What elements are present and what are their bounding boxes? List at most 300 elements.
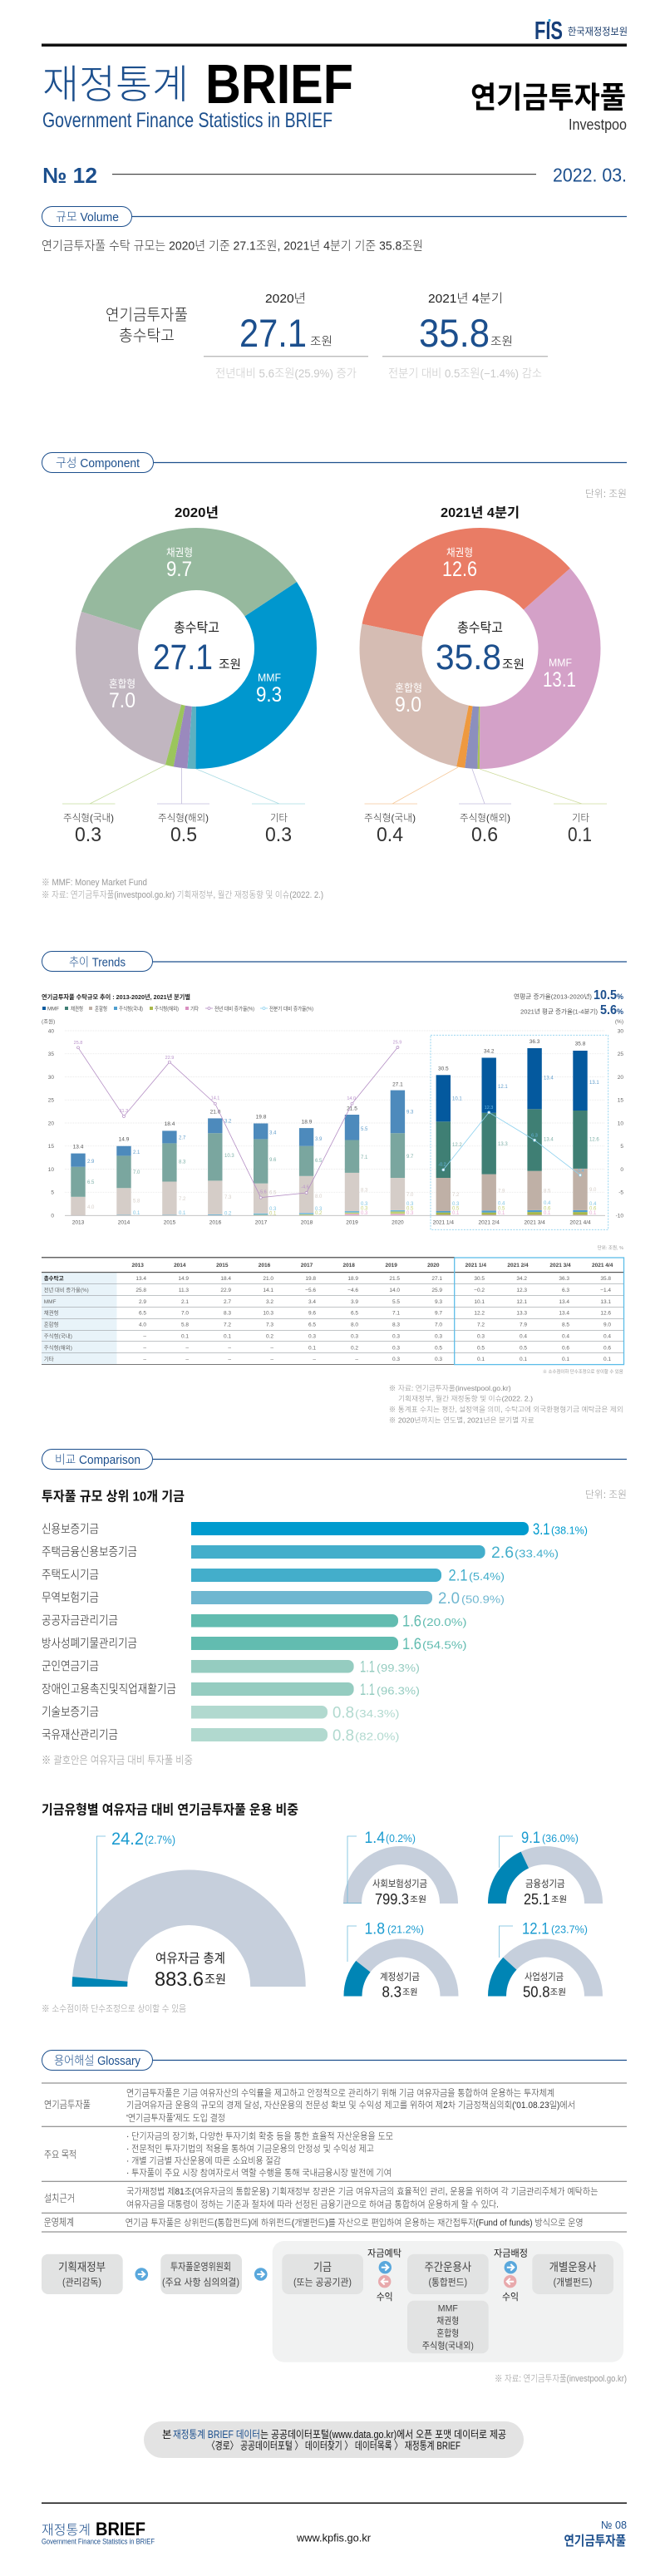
bar: 공공자금관리기금 (42, 1613, 467, 1631)
bar: 무역보험기금: (50.9%) (461, 1593, 505, 1606)
logo: FIS 한국재정정보원: FIS (534, 16, 563, 45)
label: 총수탁고 (106, 306, 188, 345)
callout: average growth: 5.6 (600, 1003, 617, 1017)
table values: 18.9 (347, 1276, 358, 1282)
donut value labels: 9.3 (256, 683, 282, 707)
table footnote: ※ 소수점이하 단수조정으로 상이할 수 있음 (543, 1368, 623, 1375)
table row labels: 주식형(해외) (44, 1343, 72, 1351)
stacked bars 2021 quarters (436, 1048, 588, 1215)
segment value labels: 13.3 (498, 1142, 508, 1147)
table values: 0.3 (392, 1333, 400, 1339)
combo chart: stacked bars and growth lines: (%) (615, 1019, 623, 1025)
component notes: ※ 자료: 연기금투자풀(investpool.go.kr) 기획재정부, 월간 재정동향 및 이슈(2022. 2.) (42, 889, 323, 900)
label: 총수탁고: 연기금투자풀 (106, 306, 188, 324)
glossary table (42, 2083, 627, 2232)
segment value labels: 3.4 (269, 1130, 277, 1135)
donut chart 2020 (106, 559, 286, 738)
box: fund types: 주식형(국내외) (422, 2341, 474, 2352)
gauge: total idle funds (96, 1830, 278, 1991)
gauge: 사회보험성기금 (347, 1830, 449, 1908)
bar: 주택도시기금: 2.1 (449, 1568, 467, 1584)
table values: 14.9 (178, 1276, 189, 1282)
total labels: 36.3 (530, 1039, 540, 1045)
right axis: -5 (618, 1190, 623, 1196)
bar: 신용보증기금 (42, 1521, 588, 1539)
small category labels (63, 812, 292, 846)
small category labels: 기타 (572, 812, 589, 824)
box: 기금: (또는 공공기관) (293, 2278, 352, 2288)
small category labels: 주식형(해외) (158, 812, 209, 824)
stat: 2020: 2020년 (265, 292, 306, 306)
table values: 14.1 (263, 1288, 273, 1293)
callout: average growth: 2021년 평균 증가율(1-4분기) (520, 1007, 598, 1016)
trends source notes: 기획재정부, 월간 재정동향 및 이슈(2022. 2.) (398, 1395, 533, 1403)
segment value labels: 4.0 (87, 1205, 95, 1210)
arrow icon (135, 2268, 148, 2281)
table values: – (185, 1345, 189, 1351)
table values: 3.4 (308, 1299, 316, 1305)
stat: 2021 Q4: 조원 (490, 334, 513, 347)
table values: 0.3 (435, 1333, 442, 1339)
table values: 10.1 (474, 1299, 485, 1305)
table values: 22.9 (220, 1288, 231, 1293)
footer logo: Government Finance Statistics in BRIEF (42, 2537, 155, 2545)
table row labels: 주식형(국내) (44, 1332, 72, 1339)
table values: 12.6 (600, 1311, 611, 1317)
glossary row: 설치근거: 설치근거 (44, 2193, 75, 2204)
heading: 2020년: 2020년 (175, 505, 219, 520)
gauge: 금융성기금: 조원 (551, 1895, 567, 1905)
box: 투자풀운영위원회: 투자풀운영위원회 (170, 2261, 231, 2273)
table values: 0.1 (181, 1333, 189, 1339)
gauge: 계정성기금: 1.8 (364, 1920, 385, 1938)
footer (42, 2502, 627, 2549)
table values (135, 1276, 611, 1362)
table values: 0.2 (351, 1345, 358, 1351)
table values: – (143, 1345, 146, 1351)
gauge: 사업성기금: 12.1 (522, 1920, 549, 1938)
glossary row: 주요 목적 (44, 2131, 393, 2178)
gauge: 사업성기금: (23.7%) (551, 1923, 588, 1935)
trends source notes: ※ 2020년까지는 연도별, 2021년은 분기별 자료 (389, 1416, 534, 1424)
table row labels: MMF (44, 1299, 57, 1305)
section heading: 규모 Volume (42, 206, 627, 226)
x axis labels: 2021 1/4 (433, 1220, 454, 1225)
segment value labels: 7.1 (361, 1155, 368, 1160)
box: 투자풀운영위원회: (주요 사항 심의의결) (162, 2278, 239, 2288)
box: fund types: 채권형 (436, 2316, 459, 2327)
title: 재정통계 BRIEF (42, 53, 353, 116)
glossary row: 주요 목적: · 투자풀이 주요 시장 참여자로서 역할 수행을 통해 국내금융시장 발전에 기여 (126, 2166, 392, 2178)
stat: 2021 Q4: 전분기 대비 0.5조원(−1.4%) 감소 (388, 367, 542, 380)
gauge: 사회보험성기금: (0.2%) (386, 1832, 416, 1845)
table values: 0.3 (435, 1357, 442, 1362)
donut value labels: 채권형 (446, 547, 473, 559)
segment value labels: 0.3 (361, 1202, 368, 1207)
segment value labels: 0.3 (269, 1207, 277, 1212)
footer logo: 재정통계 (42, 2523, 91, 2538)
gauge: total idle funds: 883.6 (155, 1968, 204, 1991)
glossary row: 설치근거 (44, 2185, 598, 2209)
bar: 방사성폐기물관리기금: (54.5%) (422, 1639, 467, 1651)
segment value labels: 0.2 (224, 1212, 232, 1217)
unit label: 단위: 조원 (585, 1489, 627, 1500)
section heading: 구성 Component (42, 452, 627, 472)
arrow icon: return (378, 2275, 391, 2288)
table values: 8.0 (351, 1322, 358, 1328)
donut center total: 총수탁고 (457, 620, 503, 635)
segment value labels: 0.3 (406, 1202, 414, 1207)
segment value labels: 8.3 (361, 1189, 368, 1194)
donut value labels (109, 547, 282, 712)
leader lines (62, 765, 305, 804)
table values: 7.2 (477, 1322, 485, 1328)
right axis: 25 (618, 1052, 623, 1057)
segment value labels: 9.6 (269, 1158, 277, 1163)
box: fund types (407, 2301, 489, 2353)
label: 자금예탁: 자금예탁 (367, 2248, 401, 2259)
left axis (48, 1028, 54, 1219)
glossary row: 주요 목적: · 단기자금의 장기화, 다양한 투자기회 확충 등을 통한 효율적 자산운용을 도모 (126, 2131, 393, 2141)
table values: 5.5 (392, 1299, 400, 1305)
table values: 9.0 (603, 1322, 611, 1328)
gauge footnote: ※ 소수점이하 단수조정으로 상이할 수 있음 (42, 2002, 186, 2014)
label: 수익: 수익 (502, 2292, 519, 2303)
donut chart 2021 Q4 (391, 559, 569, 738)
donut value labels: 9.7 (166, 558, 192, 581)
table values: – (228, 1357, 231, 1362)
gauge: 계정성기금: 8.3 (382, 1983, 401, 2000)
glossary row: 연기금투자풀: 연기금투자풀 (44, 2099, 91, 2111)
segment value labels: 10.1 (452, 1097, 462, 1102)
glossary row: 연기금투자풀: 기금여유자금 운용의 규모의 경제 달성, 자산운용의 전문성 확보 및 수익성 제고를 위하여 제2차 기금정책심의회('01.08.23일)에서 (126, 2099, 575, 2111)
topic subtitle: Investpoo (569, 116, 627, 133)
table values: 21.5 (389, 1276, 400, 1282)
panel: fund flow background (273, 2241, 623, 2362)
donut value labels (395, 547, 576, 717)
bar: 국유재산관리기금: (82.0%) (355, 1731, 399, 1742)
donut center total (436, 620, 525, 677)
total labels: 18.9 (302, 1119, 313, 1125)
segment value labels: 0.4 (544, 1201, 551, 1206)
table values: 2.9 (139, 1299, 146, 1305)
segment value labels: 7.3 (224, 1195, 232, 1200)
box: 주간운용사: (통합펀드) (428, 2278, 467, 2288)
table values: 0.6 (603, 1345, 611, 1351)
label: 수익: 수익 (377, 2292, 393, 2303)
segment value labels: 7.2 (179, 1197, 186, 1202)
segment value labels: 6.5 (87, 1180, 95, 1185)
segment value labels: 7.2 (452, 1193, 460, 1198)
bar: 신용보증기금: 3.1 (533, 1521, 550, 1539)
segment value labels: 13.4 (544, 1137, 554, 1142)
table values: 0.3 (477, 1333, 485, 1339)
gauge: 금융성기금: (36.0%) (542, 1832, 579, 1845)
x axis labels: 2015 (164, 1220, 176, 1225)
bar: 방사성폐기물관리기금 (42, 1636, 467, 1653)
bar chart: top 10 funds (42, 1521, 588, 1745)
segment value labels: 0.2 (315, 1211, 323, 1216)
box: 기금 (282, 2254, 363, 2294)
table values: 8.3 (392, 1322, 400, 1328)
table values: 13.4 (559, 1311, 569, 1317)
table values: – (143, 1357, 146, 1362)
table values: 0.6 (562, 1345, 569, 1351)
footer topic: 연기금투자풀 (564, 2534, 626, 2549)
table values: 3.9 (351, 1299, 358, 1305)
right axis: 15 (618, 1098, 623, 1104)
bar: 방사성폐기물관리기금: 방사성폐기물관리기금 (42, 1637, 137, 1651)
combo chart: stacked bars and growth lines: (조원) (42, 1017, 55, 1025)
callout: average growth: 10.5 (594, 988, 617, 1002)
table values: 0.4 (520, 1333, 527, 1339)
table values: −4.6 (347, 1288, 358, 1293)
bar: 무역보험기금: 2.0 (438, 1590, 460, 1608)
box: 개별운용사 (532, 2254, 613, 2294)
bar: 공공자금관리기금: 1.6 (402, 1613, 421, 1631)
table values: 7.0 (435, 1322, 442, 1328)
bar: 장애인고용촉진및직업재활기금: 1.1 (360, 1682, 375, 1699)
right axis: 30 (618, 1028, 623, 1034)
segment value labels: 0.5 (498, 1206, 505, 1211)
line: year-on-year growth: 25.8 (74, 1041, 82, 1046)
leader lines (364, 767, 607, 804)
gauge: 계정성기금: 계정성기금 (380, 1972, 420, 1982)
combo chart: stacked bars and growth lines (42, 1017, 623, 1251)
line: quarter-on-quarter growth: 6.3 (531, 1134, 538, 1139)
chart legend: 전분기 대비 증가율(%) (269, 1004, 313, 1012)
donut center total: 조원 (502, 658, 525, 671)
table values: 30.5 (474, 1276, 485, 1282)
glossary row: 운영체계: 운영체계 (44, 2216, 74, 2228)
donut value labels: 혼합형 (395, 682, 422, 694)
callout: average growth: % (617, 992, 623, 1001)
segment value labels: 0.5 (406, 1206, 414, 1211)
donut value labels: MMF (258, 672, 281, 683)
table values: −1.4 (600, 1288, 611, 1293)
table values: 18.4 (220, 1276, 231, 1282)
box: 기획재정부: 기획재정부 (58, 2261, 106, 2273)
left axis: 5 (51, 1190, 54, 1196)
table values: 6.5 (308, 1322, 316, 1328)
table values: 14.0 (389, 1288, 400, 1293)
small category labels: 주식형(국내) (63, 812, 114, 824)
line: year-on-year growth: 22.9 (165, 1056, 174, 1061)
segment value labels: 8.3 (179, 1160, 186, 1165)
gauge: 계정성기금: (21.2%) (387, 1923, 424, 1935)
segment value labels: 7.0 (133, 1170, 140, 1175)
table values: 9.7 (435, 1311, 442, 1317)
total labels: 35.8 (575, 1041, 586, 1047)
stacked bars 2013-2020 (71, 1091, 405, 1215)
gauge: 사회보험성기금: 사회보험성기금 (372, 1879, 427, 1889)
bar: 군인연금기금: (99.3%) (377, 1662, 420, 1674)
gauge: 사업성기금 (497, 1920, 594, 2000)
segment value labels: 0.4 (589, 1202, 597, 1207)
bar: 장애인고용촉진및직업재활기금: 장애인고용촉진및직업재활기금 (42, 1682, 176, 1697)
segment value labels: 12.6 (589, 1137, 599, 1142)
right axis (616, 1028, 623, 1219)
glossary row: 주요 목적: 주요 목적 (44, 2149, 76, 2160)
table values: 0.5 (477, 1345, 485, 1351)
table values: 5.8 (181, 1322, 189, 1328)
x axis labels: 2018 (301, 1220, 313, 1225)
segment value labels: 0.1 (133, 1211, 140, 1216)
bar: 기술보증기금: 기술보증기금 (42, 1706, 99, 1719)
bar: 국유재산관리기금 (42, 1727, 399, 1745)
footer logo (42, 2519, 155, 2545)
bar: 국유재산관리기금: 국유재산관리기금 (42, 1728, 118, 1742)
section heading: 비교 Comparison (42, 1450, 627, 1470)
bar: 기술보증기금: 0.8 (332, 1704, 354, 1722)
table values: 34.2 (516, 1276, 527, 1282)
table values: 6.3 (562, 1288, 569, 1293)
table values: 0.5 (520, 1345, 527, 1351)
box: 개별운용사: 개별운용사 (549, 2261, 597, 2273)
line: year-on-year growth: 14.1 (211, 1096, 219, 1101)
segment value labels: 9.0 (589, 1188, 597, 1193)
box: 주간운용사: 주간운용사 (424, 2261, 472, 2273)
stat: 2020: 전년대비 5.6조원(25.9%) 증가 (215, 367, 357, 380)
small category labels: 0.6 (471, 824, 498, 846)
bar: 장애인고용촉진및직업재활기금: (96.3%) (377, 1684, 420, 1697)
segment value labels: 3.2 (224, 1120, 232, 1125)
segment value labels: 0.3 (361, 1211, 368, 1216)
table values: −5.6 (305, 1288, 316, 1293)
section heading: 용어해설 Glossary (42, 2050, 627, 2070)
segment value labels: 12.2 (452, 1143, 462, 1148)
table values: 27.1 (431, 1276, 442, 1282)
segment value labels: 0.1 (179, 1211, 186, 1216)
table values: 6.5 (139, 1311, 146, 1317)
callout: open data notice (144, 2421, 524, 2458)
bar: 공공자금관리기금: 공공자금관리기금 (42, 1614, 118, 1628)
segment value labels: 8.0 (315, 1194, 323, 1199)
segment value labels: 0.3 (406, 1211, 414, 1216)
table values: −0.2 (474, 1288, 485, 1293)
segment value labels: 0.1 (589, 1211, 597, 1216)
table header (131, 1263, 613, 1268)
table values: 8.3 (224, 1311, 231, 1317)
bar: 무역보험기금 (42, 1590, 505, 1608)
right axis: -10 (616, 1213, 623, 1219)
gauge: 사업성기금: 조원 (550, 1987, 566, 1997)
total labels: 21.5 (347, 1106, 357, 1112)
segment value labels: 9.3 (406, 1111, 414, 1116)
box: fund types: MMF (438, 2304, 458, 2314)
table values: 0.1 (477, 1357, 485, 1362)
left axis: 20 (48, 1121, 54, 1126)
gauge: 사회보험성기금: 1.4 (364, 1830, 385, 1847)
segment value labels: 0.1 (452, 1211, 460, 1216)
bar: 기술보증기금: (34.3%) (355, 1707, 399, 1720)
segment value labels: 0.4 (498, 1202, 505, 1207)
table values: 0.4 (603, 1333, 611, 1339)
table values: 0.3 (392, 1345, 400, 1351)
table header: 2021 1/4 (466, 1263, 486, 1268)
callout: open data notice: 본 (162, 2429, 172, 2441)
segment value labels: 5.5 (361, 1127, 368, 1132)
section heading: 용어해설 Glossary: 용어해설 Glossary (54, 2054, 141, 2068)
box: fund types: 혼합형 (436, 2328, 459, 2339)
segment value labels: 6.5 (315, 1159, 323, 1164)
section heading: 추이 Trends (42, 951, 627, 971)
gauge: 금융성기금: 9.1 (521, 1830, 540, 1847)
x axis labels: 2021 3/4 (524, 1220, 545, 1225)
flow diagram: operating structure (42, 2241, 623, 2362)
small category labels: 0.1 (568, 824, 592, 846)
panel: total entrusted (106, 292, 548, 380)
small category labels: 주식형(해외) (460, 812, 510, 824)
heading: fund type ratio: 기금유형별 여유자금 대비 연기금투자풀 운용 비중 (42, 1802, 298, 1817)
table values: 7.0 (181, 1311, 189, 1317)
chart legend: 전년 대비 증가율(%) (214, 1004, 254, 1012)
data table (42, 1257, 623, 1365)
segment value labels: 2.7 (179, 1136, 186, 1141)
section heading: 규모 Volume: 규모 Volume (56, 211, 119, 224)
left axis: 35 (48, 1052, 54, 1057)
label: 총수탁고: 총수탁고 (119, 327, 175, 345)
callout: average growth: % (617, 1007, 623, 1016)
chart title: 연기금투자풀 수탁규모 추이 : 2013-2020년, 2021년 분기별 (42, 992, 190, 1001)
volume description: 연기금투자풀 수탁 규모는 2020년 기준 27.1조원, 2021년 4분기 기준 35.8조원 (42, 239, 423, 253)
note: ratio explanation: ※ 괄호안은 여유자금 대비 투자풀 비중 (42, 1754, 193, 1766)
box: 주간운용사 (407, 2254, 489, 2294)
callout: average growth (514, 988, 623, 1017)
logo: FIS 한국재정정보원: 한국재정정보원 (568, 26, 628, 37)
segment value labels: 3.9 (315, 1137, 323, 1142)
table values: – (355, 1357, 358, 1362)
panel: donut 2021 Q4 (364, 505, 607, 846)
table values: 0.3 (351, 1333, 358, 1339)
table header: 2017 (301, 1263, 313, 1268)
line: year-on-year growth: 11.3 (120, 1109, 128, 1114)
table values: 0.3 (308, 1333, 316, 1339)
table values: 0.5 (435, 1345, 442, 1351)
trends source notes (389, 1384, 623, 1424)
line: year-on-year growth: -5.6 (259, 1190, 267, 1195)
table values: 13.1 (600, 1299, 611, 1305)
table header: 2018 (342, 1263, 355, 1268)
table values: 13.4 (559, 1299, 569, 1305)
table values: 13.4 (135, 1276, 146, 1282)
segment value labels: 13.1 (589, 1081, 599, 1086)
glossary row: 연기금투자풀: 연기금투자풀은 기금 여유자산의 수익률을 제고하고 안정적으로 관리하기 위해 기금 여유자금을 통합하여 운용하는 투자체계 (126, 2086, 554, 2098)
line: year-on-year growth: -4.6 (301, 1185, 309, 1190)
table values: 25.9 (431, 1288, 442, 1293)
left axis: 30 (48, 1075, 54, 1081)
bar: 군인연금기금: 군인연금기금 (42, 1659, 99, 1674)
gauge: 금융성기금: 금융성기금 (525, 1879, 565, 1889)
gauge: 사업성기금: 50.8 (523, 1983, 550, 2000)
x axis labels: 2020 (392, 1220, 404, 1225)
segment value labels: 10.3 (224, 1154, 234, 1159)
trends source notes: ※ 자료: 연기금투자풀(investpool.go.kr) (389, 1384, 511, 1392)
trends source notes: ※ 통계표 수치는 평잔, 설정액을 의미, 수탁고에 외국환평형기금 예탁금은 제외 (389, 1405, 623, 1413)
table values: 4.0 (139, 1322, 146, 1328)
small category labels: 주식형(국내) (364, 812, 416, 824)
donut center total: 27.1 (153, 638, 213, 677)
total labels: 18.4 (165, 1121, 175, 1127)
donut value labels: 9.0 (395, 693, 421, 717)
table values: – (143, 1333, 146, 1339)
table header: 2014 (174, 1263, 186, 1268)
table values: 7.3 (266, 1322, 273, 1328)
segment value labels: 0.1 (269, 1212, 277, 1217)
gauge: 계정성기금: 조원 (402, 1987, 417, 1997)
chart legend: 기타 (190, 1004, 199, 1012)
bar: 신용보증기금: (38.1%) (551, 1524, 588, 1536)
